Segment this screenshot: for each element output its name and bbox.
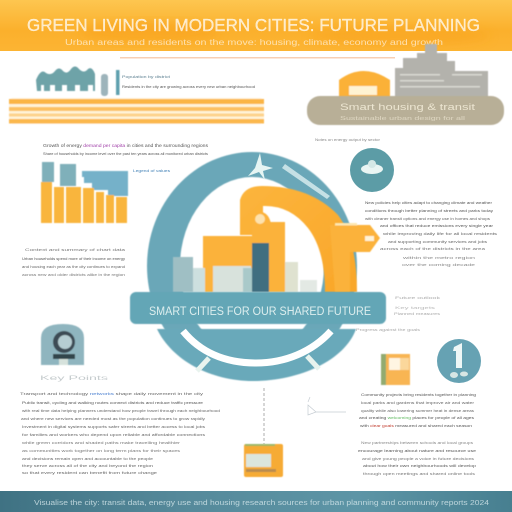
icon: golden dome xyxy=(339,71,390,100)
text block: right column: New policies help cities adapt to changing climate and weather xyxy=(365,200,493,205)
subtitle: Urban areas and residents on the move: housing, climate, economy and growth xyxy=(65,38,443,47)
text block: lower right: Community projects bring residents together in planning xyxy=(361,392,476,397)
text block: right column: while improving daily life for all local residents xyxy=(383,231,497,236)
text block: lower left: Public transit, cycling and walking routes connect districts and reduce traffic pressure xyxy=(22,400,204,405)
text block: right column: Key targets xyxy=(395,306,435,310)
orange arc xyxy=(240,186,357,292)
bar chart xyxy=(41,162,128,223)
text block: lower left: and decisions remain open and accountable to the people xyxy=(22,456,154,461)
text block: right column: within the metro region xyxy=(403,255,475,260)
text block: lower right xyxy=(358,392,477,476)
text block: chart note: and housing each year as the city continues to expand xyxy=(22,264,125,269)
icon: orange framed building xyxy=(381,354,410,385)
text block: right column: over the coming decade xyxy=(402,262,476,267)
text block: right column: with cleaner transit options and energy use in homes and shops xyxy=(365,216,490,221)
text block: lower right: with clear goals measured and shared each season xyxy=(360,423,472,428)
text block: lower left: as communities work together on long term plans for their spaces xyxy=(22,448,180,453)
text block: chart note: Urban households spend more of their income on energy xyxy=(22,256,125,261)
text block: chart note xyxy=(22,247,126,277)
central emblem xyxy=(130,152,386,381)
skyline xyxy=(173,212,317,292)
text block: lower left: and where new services are needed most as the population continues to grow rapidly xyxy=(21,416,205,421)
text block: lower right: quality while also lowering summer heat in dense areas xyxy=(361,408,474,413)
text block: right column: and supporting community services and jobs xyxy=(388,239,487,244)
icon: faint sketch xyxy=(308,397,346,415)
text block: right column: and offices that reduce emissions every single year xyxy=(380,223,494,228)
icon: robot in arch xyxy=(41,324,84,365)
footer band xyxy=(0,491,512,512)
text block: lower left: Investment in digital systems supports safer streets and better access to local jobs xyxy=(22,424,205,429)
text block: lower left: Transport and technology networks shape daily movement in the city xyxy=(20,391,203,396)
text block: right column: Planned measures xyxy=(394,312,440,316)
footer text: Visualise the city: transit data, energy use and housing research sources for urban planning and community reports 2024 xyxy=(34,500,489,507)
text: population notes: Population by district xyxy=(122,75,170,79)
text block: right column: Progress against the goals xyxy=(356,328,420,332)
text block: lower left xyxy=(20,391,220,475)
icon: teal circle top xyxy=(350,148,394,192)
text block: lower right: local parks and gardens that improve air and water xyxy=(361,400,475,405)
panel: population summary xyxy=(9,57,395,124)
text block: right column: across each of the districts in the area xyxy=(380,246,486,251)
text block: lower left: so that every resident can benefit from future change xyxy=(22,470,158,475)
pill label xyxy=(307,96,504,125)
panel: bar chart block xyxy=(22,143,208,277)
pill label: Smart housing & transit xyxy=(340,102,476,112)
connector line xyxy=(263,388,265,444)
icon: ring satellite xyxy=(282,164,330,199)
text block: right column xyxy=(356,200,497,332)
lower ring and segment xyxy=(157,329,356,381)
text block: lower right: New partnerships between schools and local groups xyxy=(361,440,473,445)
text: population notes xyxy=(122,75,255,89)
pill label: Sustainable urban design for all xyxy=(340,116,465,122)
text block: right column: Future outlook xyxy=(395,296,440,300)
text: population notes: Residents in the city are growing across every new urban neighbourhood xyxy=(122,84,255,89)
text block: chart note: across new and older districts alike in the region xyxy=(22,272,125,277)
chart caption line: Share of households by income level over the past ten years across all monitored urban districts xyxy=(43,152,208,156)
text block: lower right: through open meetings and shared online tools xyxy=(363,471,475,476)
text block: lower right: about how their own neighbourhoods will develop xyxy=(363,463,477,468)
icon: orange document box xyxy=(244,444,283,477)
text block: lower right: encourage learning about nature and resource use xyxy=(358,448,477,453)
banner xyxy=(130,292,386,324)
panel: buildings callout xyxy=(307,44,504,125)
text block: lower right: and creating welcoming places for people of all ages xyxy=(359,415,474,420)
banner: SMART CITIES FOR OUR SHARED FUTURE xyxy=(149,306,371,318)
white divider arc xyxy=(183,331,331,363)
chart legend: Legend of values xyxy=(133,169,170,173)
icon: group of people xyxy=(36,66,120,96)
text block: lower left: while green corridors and shaded paths make travelling healthier xyxy=(22,440,181,445)
icon: grey city building xyxy=(395,44,488,98)
title: GREEN LIVING IN MODERN CITIES: FUTURE PLANNING xyxy=(27,15,480,35)
text block: chart note: Context and summary of chart data xyxy=(25,247,126,252)
text: top centre note: Notes on energy output by sector xyxy=(315,138,381,142)
text block: lower left: for families and workers who depend upon reliable and affordable connections xyxy=(22,432,205,437)
text block: lower left: they serve across all of the city and beyond the region xyxy=(22,463,153,468)
ring xyxy=(147,152,357,380)
orange sign xyxy=(330,223,380,292)
text block: lower right: and give young people a voice in future decisions xyxy=(362,456,474,461)
icon caption: Key Points xyxy=(40,376,108,382)
ring notches xyxy=(197,356,319,371)
header band xyxy=(0,0,512,51)
icon: info circle xyxy=(437,339,481,383)
striped banner xyxy=(9,98,264,124)
text block: lower left: with real time data helping planners understand how people travel through each neighbourhood xyxy=(22,408,220,413)
chart heading: Growth of energy demand per capita in cities and the surrounding regions xyxy=(43,143,208,148)
text block: right column: conditions through better planning of streets and parks today xyxy=(365,208,493,213)
icon: ring star xyxy=(248,153,273,180)
